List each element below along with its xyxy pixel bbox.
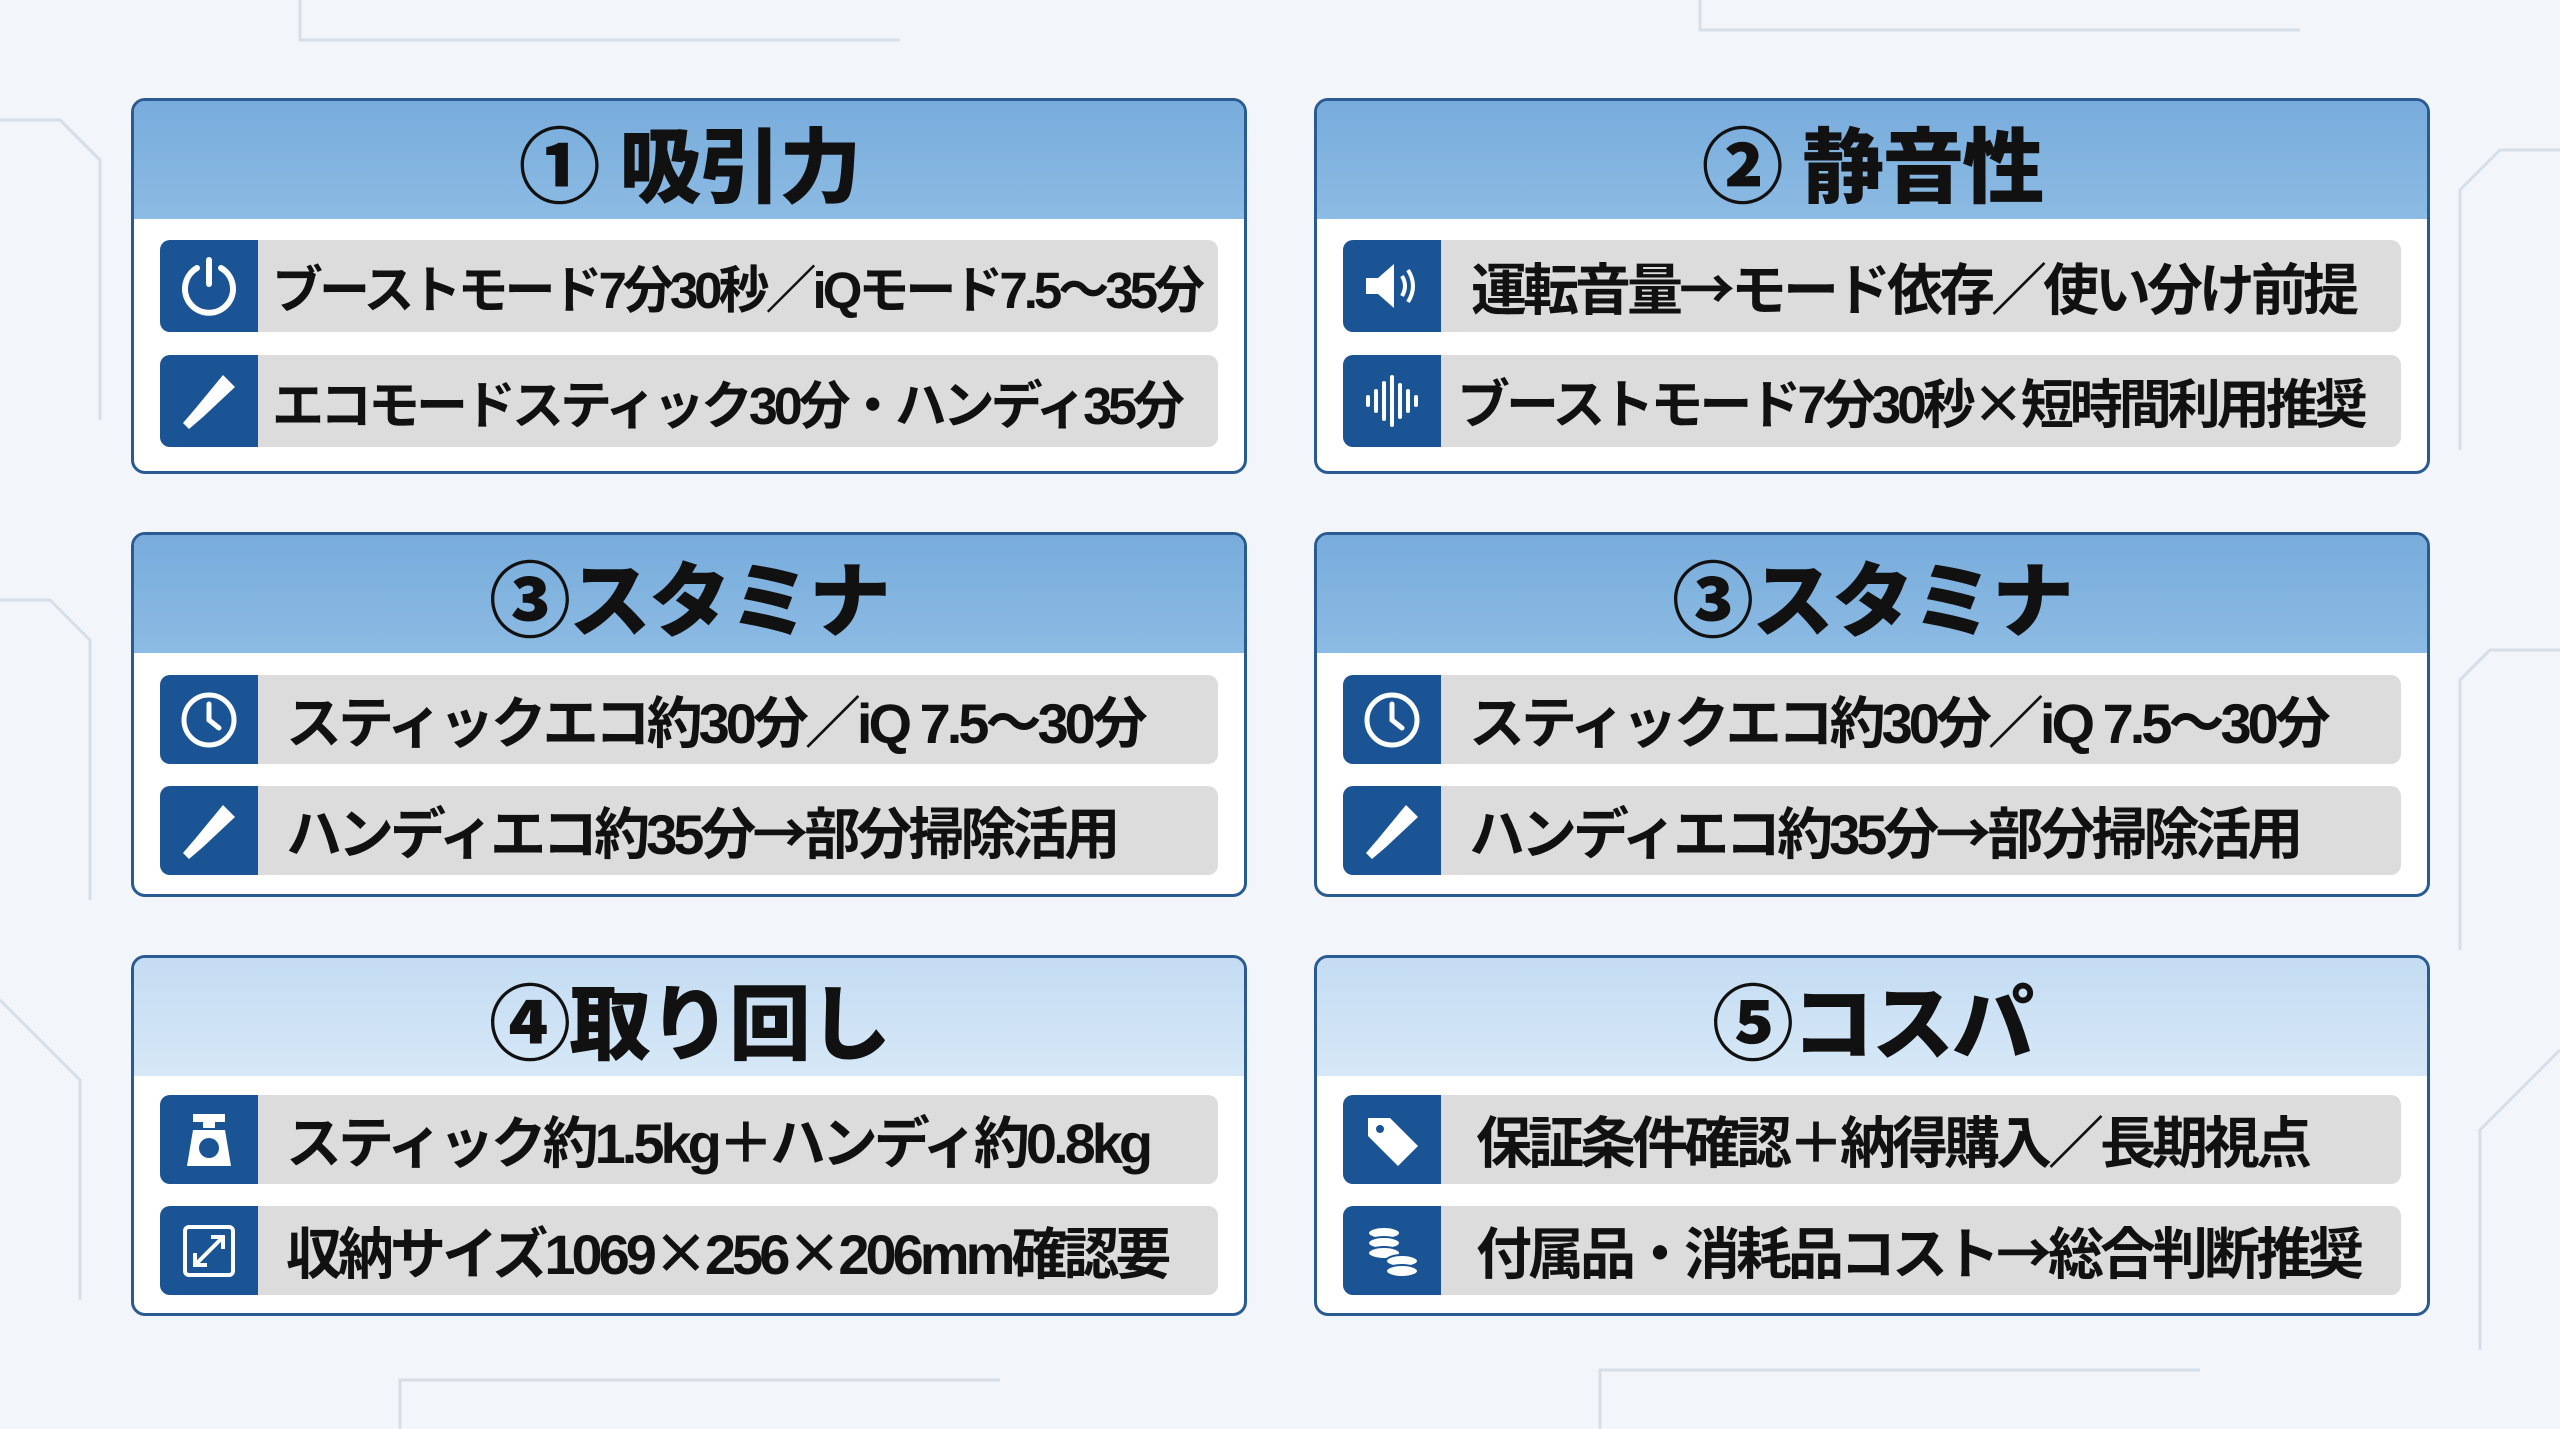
heading: stamina: [1317, 535, 2427, 653]
panel: 5 cost performance: [1314, 955, 2430, 1316]
panel: 3 stamina left: [131, 532, 1247, 897]
row: boost short: ブーストモード7分30秒×短時間利用推奨: [1457, 363, 2364, 439]
heading: suction: [134, 101, 1244, 219]
row: weight: [160, 1095, 1218, 1184]
row: weight: スティック約1.5kg＋ハンディ約0.8kg: [286, 1112, 1149, 1175]
row: stick eco: [1343, 675, 2401, 764]
row: stick eco: スティックエコ約30分／iQ 7.5〜30分: [1469, 692, 2327, 755]
heading: cost: [1317, 958, 2427, 1076]
heading: handling: ④取り回し: [489, 980, 889, 1070]
heading: suction: ① 吸引力: [519, 122, 859, 214]
row: accessories: 付属品・消耗品コスト→総合判断推奨: [1476, 1210, 2360, 1291]
panel: 1 suction: [131, 98, 1247, 474]
row: eco mode: エコモードスティック30分・ハンディ35分: [272, 378, 1181, 436]
row: eco mode: [160, 355, 1218, 447]
row: handy eco: ハンディエコ約35分→部分掃除活用: [1469, 790, 2299, 871]
panel: 3 stamina right: [1314, 532, 2430, 897]
panel: 2 quietness: [1314, 98, 2430, 474]
heading: quietness: ② 静音性: [1702, 122, 2042, 214]
row: volume: 運転音量→モード依存／使い分け前提: [1471, 246, 2355, 326]
heading: stamina: ③スタミナ: [489, 556, 889, 648]
heading: cost: ⑤コスパ: [1712, 980, 2032, 1070]
row: warranty: 保証条件確認＋納得購入／長期視点: [1476, 1112, 2308, 1175]
row: size: 収納サイズ1069×256×206mm確認要: [286, 1210, 1167, 1291]
heading: stamina: [134, 535, 1244, 653]
row: stick eco: [160, 675, 1218, 764]
row: boost mode: ブーストモード7分30秒／iQモード7.5〜35分: [272, 262, 1201, 319]
heading: quietness: [1317, 101, 2427, 219]
row: warranty: [1343, 1095, 2401, 1184]
row: handy eco: ハンディエコ約35分→部分掃除活用: [286, 790, 1116, 871]
row: boost mode: [160, 240, 1218, 332]
panel: 4 handling: [131, 955, 1247, 1316]
heading: stamina: ③スタミナ: [1672, 556, 2072, 648]
heading: handling: [134, 958, 1244, 1076]
row: stick eco: スティックエコ約30分／iQ 7.5〜30分: [286, 692, 1144, 755]
